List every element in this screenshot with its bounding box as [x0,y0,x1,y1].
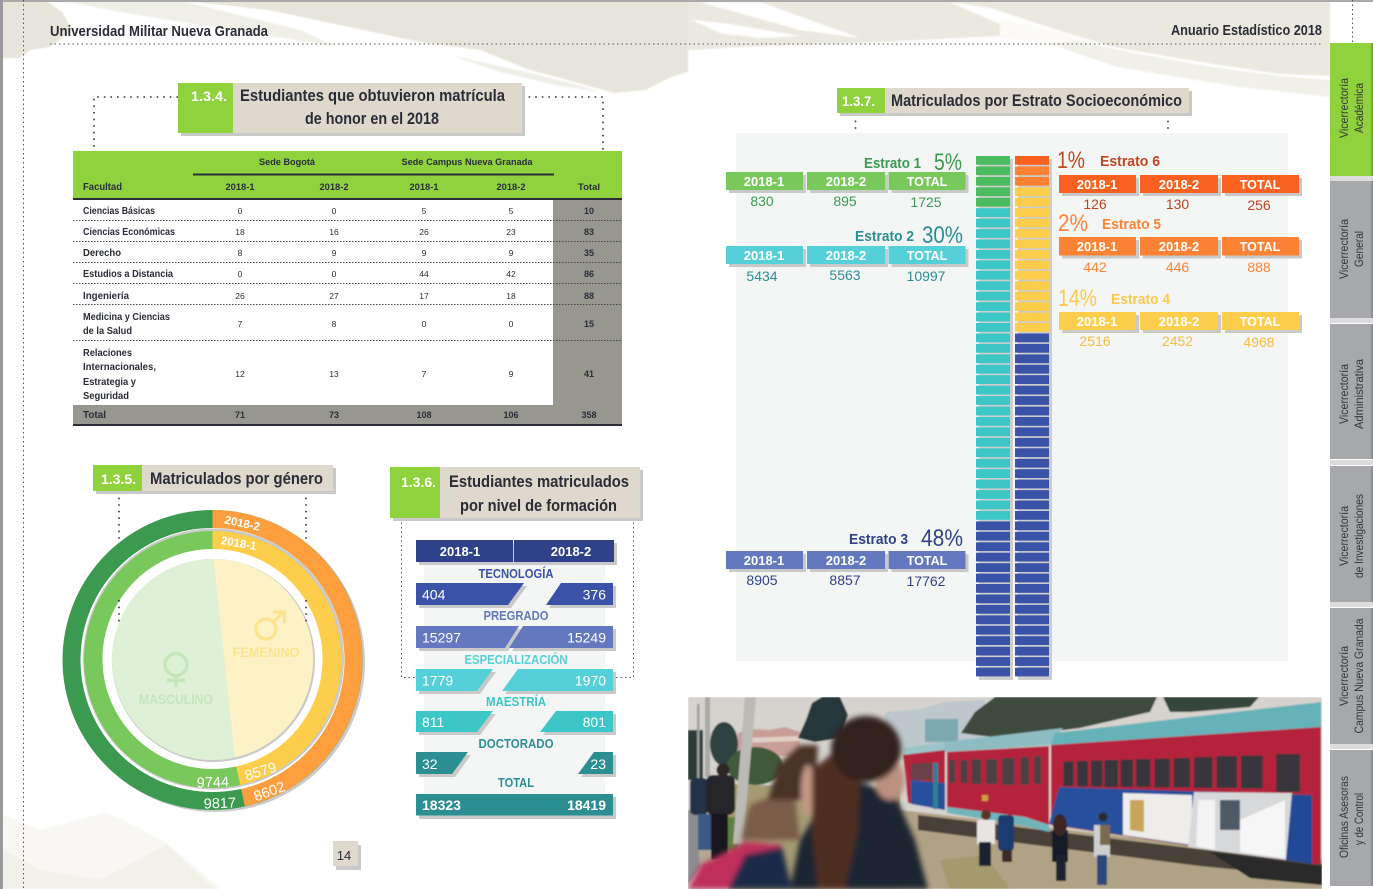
table: honor enrolment: Sede Campus Nueva Granada [402,157,534,167]
block: estrato 5: 2% [1058,210,1088,237]
train carriage 2 [945,728,1063,752]
block: estrato 6: 2018-1 [1077,177,1117,192]
row: tecnología: TECNOLOGÍA [478,566,554,581]
row: doctorado: 32 [422,756,438,772]
icon: mars symbol [256,612,284,639]
table: honor enrolment: 42 [506,269,516,279]
heading 1.3.7 [837,88,1192,116]
block: estrato 2: 2018-2 [826,248,866,263]
small figures [690,764,1110,885]
stacked unit bars [976,156,1052,680]
chart: levels of education [416,540,617,819]
table: honor enrolment: 12 [235,369,245,379]
table: honor enrolment: 73 [329,410,339,420]
table: honor enrolment: 5 [509,206,514,216]
table: honor enrolment: 106 [503,410,519,420]
heading 1.3.7: 1.3.7. [842,93,875,109]
row: maestría: 801 [583,714,606,730]
block: estrato 3: 2018-2 [826,553,866,568]
block: estrato 1: 1725 [910,194,942,210]
block: estrato 3: TOTAL [907,554,948,568]
heading 1.3.6: 1.3.6. [401,474,436,490]
table: honor enrolment: 9 [509,369,514,379]
block: estrato 1: 2018-1 [744,174,784,189]
value: 8579: 8579 [243,760,279,785]
block: estrato 4: 2018-2 [1159,314,1199,329]
tab: Vicerrectoría Administrativa [1330,324,1373,459]
block: estrato 3 [726,525,968,589]
row: especialización: ESPECIALIZACIÓN [464,652,568,667]
heading 1.3.5: 1.3.5. [101,471,136,487]
block: estrato 2: Estrato 2 [855,228,914,245]
label: femenino: FEMENINO [232,645,300,660]
block: estrato 1: 830 [750,193,774,209]
table: honor enrolment: 0 [509,319,514,329]
block: estrato 2: 5434 [746,268,778,284]
table: honor enrolment: 7 [238,319,243,329]
block: estrato 4: Estrato 4 [1111,291,1171,308]
heading 1.3.5 [93,465,336,494]
blurred foreground people [688,716,928,889]
block: estrato 3: 2018-1 [744,553,784,568]
table: honor enrolment: 86 [584,269,594,279]
table: honor enrolment: 7 [422,369,427,379]
heading 1.3.4: Estudiantes que obtuvieron matrícula [240,86,505,105]
table: honor enrolment: Relaciones [83,348,132,359]
table: honor enrolment: Sede Bogotá [259,157,316,167]
tab: Vicerrectoría Académica: Académica [1352,83,1366,133]
table: honor enrolment: 0 [332,269,337,279]
block: estrato 6: TOTAL [1240,178,1281,192]
heading 1.3.5: Matriculados por género [150,469,323,488]
table: honor enrolment: 26 [419,227,429,237]
block: estrato 6: 126 [1083,196,1107,212]
value: 9817: 9817 [203,795,236,813]
table: honor enrolment: 2018-2 [320,182,348,192]
table: honor enrolment: Derecho [83,248,121,259]
heading 1.3.4 [178,83,525,136]
block: estrato 4: 2018-1 [1077,314,1117,329]
section 1.3.4 connector [94,97,603,150]
heading 1.3.6: Estudiantes matriculados [449,472,629,491]
block: estrato 5: TOTAL [1240,240,1281,254]
block: estrato 1: TOTAL [907,175,948,189]
row: especialización [416,652,616,694]
heading 1.3.6: por nivel de formación [460,496,617,515]
table: honor enrolment: 13 [329,369,339,379]
value: 9744: 9744 [196,774,229,792]
row: tecnología [416,566,616,608]
donut chart: gender [62,510,365,813]
section 1.3.7 connector [856,114,1168,132]
table: honor enrolment: 9 [422,248,427,258]
column headers: 2018-2 [551,544,591,559]
block: estrato 4: TOTAL [1240,315,1281,329]
table: honor enrolment: 41 [584,369,594,379]
block: estrato 5: Estrato 5 [1102,216,1161,233]
block: estrato 3: Estrato 3 [849,531,908,548]
table: honor enrolment: 8 [238,248,243,258]
tab: Vicerrectoría General: General [1352,231,1366,267]
table: honor enrolment: 10 [584,206,594,216]
block: estrato 2: 30% [922,222,963,249]
ring label: 2018-2: 2018-2 [223,514,261,534]
table: honor enrolment: 9 [332,248,337,258]
tab: Vicerrectoría Campus Nueva Granada: Campus Nueva Granada [1352,618,1366,734]
block: estrato 6: 130 [1166,196,1189,212]
row: tecnología: 404 [422,586,446,602]
distant buildings and trees [885,700,985,752]
table: honor enrolment: Estrategia y [83,377,136,388]
block: estrato 4: 2452 [1162,333,1193,349]
tab: Vicerrectoría Académica: Vicerrectoría [1337,78,1351,138]
tab: Vicerrectoría General: Vicerrectoría [1337,219,1351,279]
train carriage 1 [1051,702,1321,745]
table: honor enrolment: 2018-2 [496,182,526,192]
heading 1.3.7: Matriculados por Estrato Socioeconómico [891,91,1182,110]
block: estrato 2: 5563 [829,267,861,283]
block: estrato 4: 2516 [1079,333,1111,349]
row: maestría [416,694,616,735]
tab: Vicerrectoría Campus Nueva Granada [1330,608,1373,744]
row: doctorado: DOCTORADO [478,737,554,751]
page number [333,841,361,870]
table: honor enrolment [73,151,622,426]
block: estrato 1: 5% [934,149,962,176]
block: estrato 1 [726,149,968,210]
table: honor enrolment: Total [578,182,600,192]
table: honor enrolment: 0 [332,206,337,216]
table: honor enrolment: Total [83,410,106,421]
table: honor enrolment: 27 [329,291,339,301]
tab: Vicerrectoría General [1330,181,1373,318]
section 1.3.7 panel background [736,133,1288,661]
table: honor enrolment: 8 [332,319,337,329]
ground [728,784,900,889]
row: doctorado: 23 [590,756,606,772]
block: estrato 5: 888 [1247,259,1271,275]
table: honor enrolment: 35 [584,248,594,258]
table: honor enrolment: Medicina y Ciencias [83,312,170,323]
block: estrato 4: 4968 [1243,334,1275,350]
table: honor enrolment: 108 [416,410,432,420]
label: masculino: MASCULINO [139,692,213,707]
photo: students beside the train [688,697,1322,889]
side tabs [1330,43,1373,886]
row: especialización: 1970 [575,672,606,688]
table: honor enrolment: 88 [584,291,594,301]
block: estrato 3: 8905 [746,572,778,588]
row: pregrado: PREGRADO [484,609,549,623]
block: estrato 3: 8857 [829,572,861,588]
section 1.3.5 connector [119,491,306,545]
table: honor enrolment: 358 [581,410,597,420]
row: pregrado: 15249 [567,630,606,646]
row: total [416,776,616,819]
row: maestría: 811 [422,714,445,730]
table: honor enrolment: Ingeniería [83,291,129,302]
row: total: 18419 [567,797,606,813]
tab: Vicerrectoría de Investigaciones: de Investigaciones [1352,494,1366,578]
train carriage 3 [903,742,945,757]
row: total: TOTAL [498,776,534,790]
block: estrato 1: 2018-2 [826,174,866,189]
ring label: 2018-1: 2018-1 [220,535,258,553]
row: pregrado: 15297 [422,630,461,646]
block: estrato 2: 2018-1 [744,248,784,263]
table: honor enrolment: 16 [329,227,339,237]
table: honor enrolment: 23 [506,227,516,237]
table: honor enrolment: 18 [506,291,516,301]
row: maestría: MAESTRÍA [486,694,546,709]
block: estrato 6: 256 [1247,197,1271,213]
heading 1.3.4: de honor en el 2018 [305,109,439,128]
table: honor enrolment: 71 [235,410,245,420]
table: honor enrolment: 17 [419,291,429,301]
block: estrato 6: 1% [1057,147,1085,174]
table: honor enrolment: 5 [422,206,427,216]
icon: venus symbol [165,654,187,687]
table: honor enrolment: Seguridad [83,391,129,402]
heading 1.3.6 [390,467,643,521]
block: estrato 3: 48% [921,525,963,552]
block: estrato 5: 446 [1166,259,1189,275]
table: honor enrolment: 44 [419,269,429,279]
header: left: Universidad Militar Nueva Granada [50,23,269,40]
block: estrato 6 [1057,147,1302,213]
page number: 14 [337,848,351,863]
table: honor enrolment: 2018-1 [226,182,254,192]
tab: Oficinas Asesoras y de Control: Oficinas Asesoras [1337,776,1351,858]
table: honor enrolment: 2018-1 [410,182,438,192]
table: honor enrolment: Facultad [83,182,122,193]
block: estrato 2: TOTAL [907,249,948,263]
block: estrato 3: 17762 [907,573,946,589]
table: honor enrolment: Ciencias Económicas [83,227,175,238]
tab: Oficinas Asesoras y de Control: y de Control [1352,793,1366,845]
tab: Oficinas Asesoras y de Control [1330,750,1373,886]
block: estrato 1: 895 [833,193,857,209]
row: especialización: 1779 [422,672,453,688]
tab: Vicerrectoría Administrativa: Vicerrectoría [1337,364,1351,424]
block: estrato 5 [1058,210,1302,275]
table: honor enrolment: 15 [584,319,594,329]
table: honor enrolment: 0 [238,206,243,216]
table: honor enrolment: Estudios a Distancia [83,269,173,280]
header: right: Anuario Estadístico 2018 [1171,22,1322,39]
table: honor enrolment: 0 [238,269,243,279]
row: tecnología: 376 [583,586,606,602]
block: estrato 5: 442 [1083,259,1107,275]
table: honor enrolment: 0 [422,319,427,329]
poles [733,697,756,844]
column headers: 2018-1 [440,544,480,559]
row: total: 18323 [422,797,461,813]
block: estrato 2 [726,222,968,284]
value: 8602: 8602 [252,779,288,805]
block: estrato 6: 2018-2 [1159,177,1199,192]
tab: Vicerrectoría Académica [1330,43,1373,176]
tab: Vicerrectoría Administrativa: Administrativa [1352,359,1366,429]
block: estrato 1: Estrato 1 [864,155,921,172]
table: honor enrolment: 9 [509,248,514,258]
column headers [416,540,617,565]
table: honor enrolment: Ciencias Básicas [83,206,155,217]
tab: Vicerrectoría de Investigaciones: Vicerrectoría [1337,506,1351,566]
row: pregrado [416,609,616,651]
block: estrato 5: 2018-2 [1159,239,1199,254]
table: honor enrolment: 18 [235,227,245,237]
block: estrato 2: 10997 [907,268,946,284]
table: honor enrolment: 83 [584,227,594,237]
table: honor enrolment: de la Salud [83,326,132,337]
block: estrato 6: Estrato 6 [1100,153,1160,170]
section 1.3.6 connector [402,518,634,678]
block: estrato 4: 14% [1058,285,1097,312]
block: estrato 5: 2018-1 [1077,239,1117,254]
tab: Vicerrectoría Campus Nueva Granada: Vicerrectoría [1337,646,1351,706]
row: doctorado [416,737,616,777]
table: honor enrolment: Internacionales, [83,362,156,373]
table: honor enrolment: 26 [235,291,245,301]
block: estrato 4 [1058,285,1302,350]
tab: Vicerrectoría de Investigaciones [1330,466,1373,602]
heading 1.3.4: 1.3.4. [191,88,227,104]
